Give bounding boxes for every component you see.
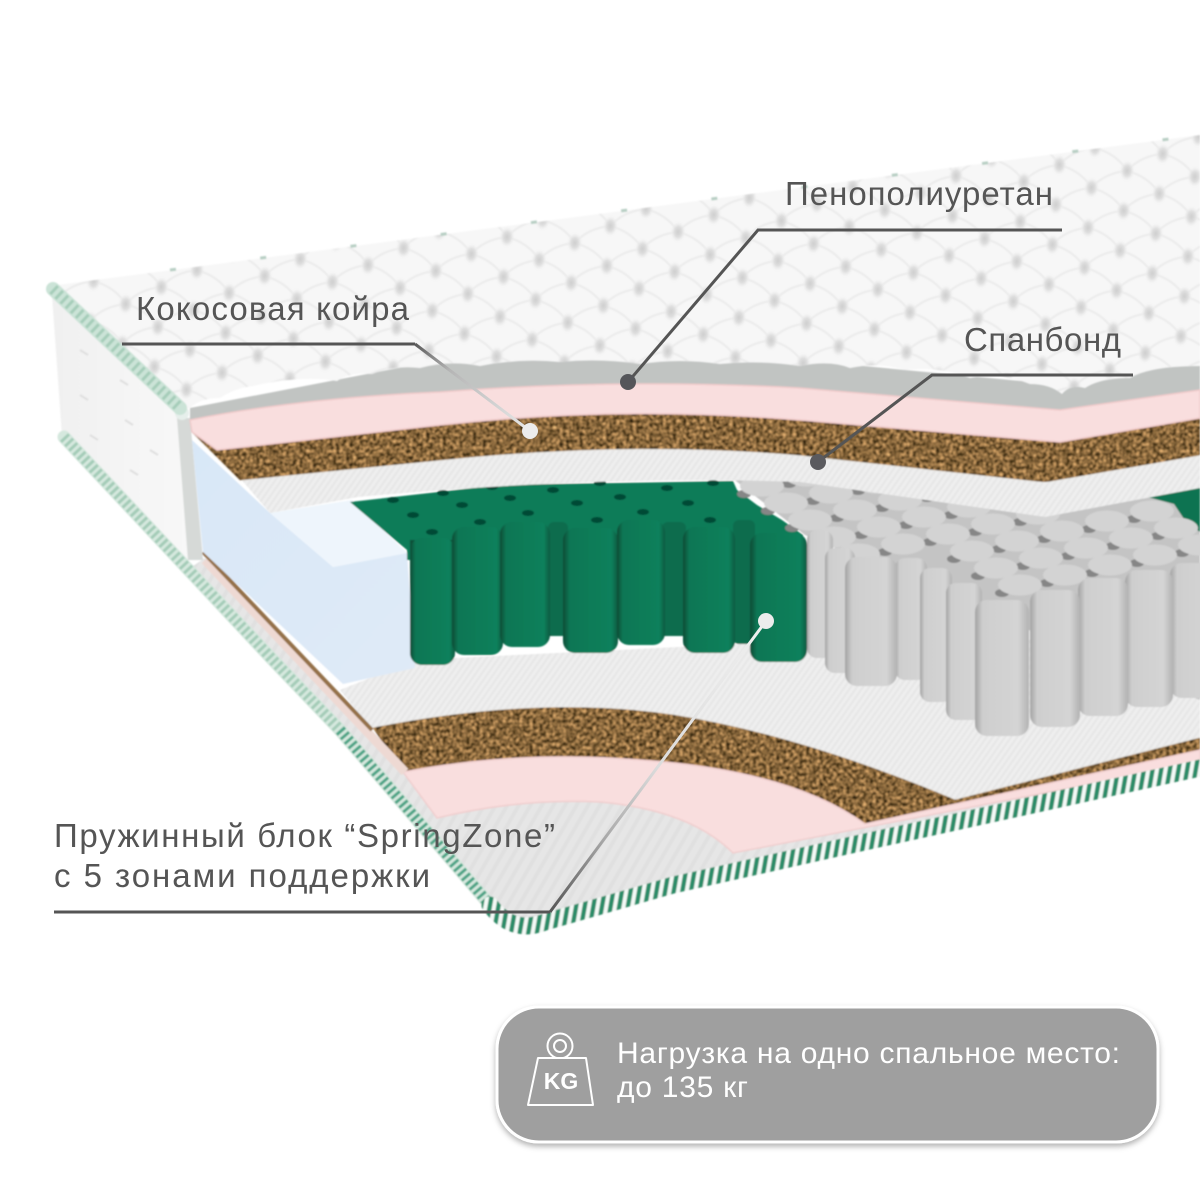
icon: kg weight — [528, 1034, 593, 1105]
grey spring columns — [807, 530, 1200, 736]
lower left rope edge — [64, 437, 490, 905]
callout: Пенополиуретан: Пенополиуретан — [785, 175, 1053, 212]
icon: kg weight: KG — [544, 1068, 578, 1094]
thin edge strips — [203, 552, 405, 772]
load capacity text — [617, 1037, 1120, 1104]
upper left rope edge — [53, 135, 1200, 408]
callout: Спанбонд — [810, 321, 1133, 470]
front striped rope edge — [490, 768, 1200, 926]
lower quilted fabric — [187, 558, 1200, 922]
callout: Кокосовая койра — [122, 290, 538, 439]
grey spring tops — [737, 466, 1200, 597]
blue foam perimeter — [192, 440, 415, 684]
green corner at right — [1140, 480, 1200, 532]
load capacity panel — [497, 1007, 1158, 1142]
gaps between green spring tops — [387, 480, 719, 535]
callout: Кокосовая койра: Кокосовая койра — [136, 290, 410, 327]
callout: Пружинный блок: Пружинный блок “SpringZone” — [54, 817, 555, 854]
top spunbond layer — [240, 444, 1200, 517]
callout: Пружинный блок — [54, 613, 774, 912]
upper coconut coir layer — [192, 409, 1200, 482]
corner post — [175, 406, 203, 560]
quilted top surface — [50, 135, 1200, 412]
lower pink foam layer — [403, 750, 1200, 853]
green springs — [350, 480, 807, 665]
load capacity text: до 135 кг — [617, 1071, 748, 1104]
mattress illustration — [50, 135, 1200, 926]
grey polyurethane foam layer — [190, 360, 1200, 425]
side wall — [52, 296, 188, 560]
upper pink foam layer — [190, 384, 1200, 450]
grey springs — [722, 466, 1200, 736]
bottom spunbond layer — [340, 640, 1200, 800]
lower coconut coir layer — [373, 707, 1200, 824]
green spring columns — [410, 520, 807, 665]
load capacity text: Нагрузка на одно спальное место: — [617, 1037, 1120, 1070]
callout: Спанбонд: Спанбонд — [964, 321, 1121, 358]
callout: Пружинный блок: с 5 зонами поддержки — [54, 857, 430, 894]
callout: Пенополиуретан — [620, 175, 1062, 390]
